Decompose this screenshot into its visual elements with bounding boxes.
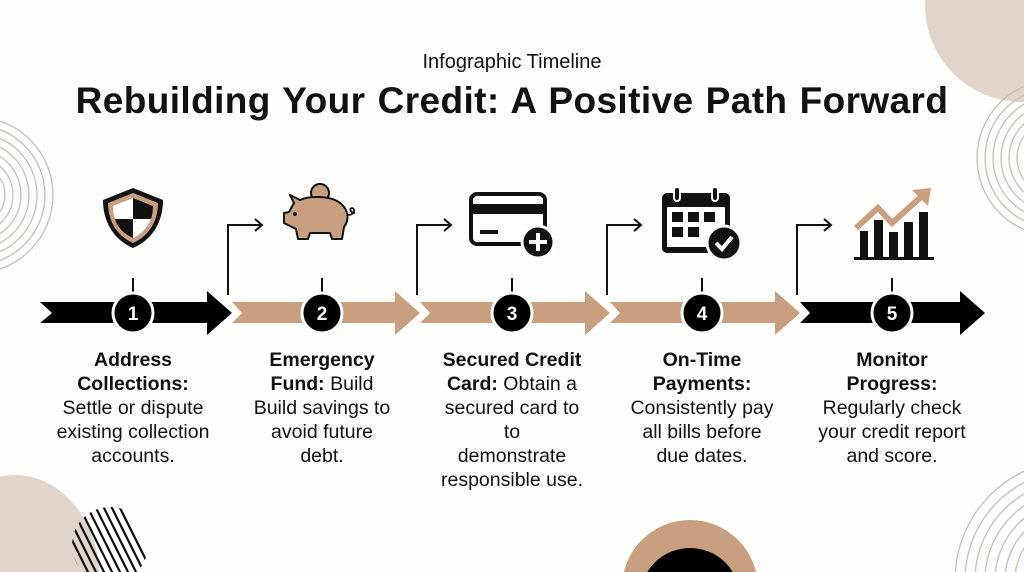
number circles: 3 xyxy=(507,304,517,325)
text: step 4: Consistently pay xyxy=(630,397,774,419)
text: step 3: Card: Obtain a xyxy=(447,373,577,395)
segment 1 xyxy=(40,291,232,335)
text: step 1: Settle or dispute xyxy=(63,397,203,419)
segment 5 xyxy=(800,291,985,335)
text: step 4: all bills before xyxy=(642,421,762,443)
text: step 1: Collections: xyxy=(77,373,189,395)
text: step 2 xyxy=(254,349,390,467)
segment 3 xyxy=(420,291,610,335)
text: step 2: Emergency xyxy=(269,349,375,371)
text: step 3: demonstrate xyxy=(458,445,566,467)
text: step 5: your credit report xyxy=(818,421,966,443)
text: step 1: existing collection xyxy=(57,421,209,443)
text: step 4: due dates. xyxy=(656,445,748,467)
text: step 3: responsible use. xyxy=(441,469,583,491)
text: step 3: Secured Credit xyxy=(443,349,581,371)
text: step 2: avoid future xyxy=(271,421,373,443)
subtitle: Infographic Timeline xyxy=(422,51,601,73)
number circles: 2 xyxy=(317,304,327,325)
icon: credit card with plus xyxy=(469,192,552,256)
text: step 5: Monitor xyxy=(856,349,928,371)
text: step 5 xyxy=(818,349,966,467)
text: step 5: Progress: xyxy=(846,373,938,395)
number circles: 5 xyxy=(887,304,898,325)
text: step 1: accounts. xyxy=(91,445,175,467)
text: step 3: secured card to xyxy=(445,397,579,419)
text: step 4 xyxy=(630,349,774,467)
segment 2 xyxy=(232,291,420,335)
text: step 1 xyxy=(57,349,209,467)
text: step 4: Payments: xyxy=(653,373,751,395)
icon: growth chart xyxy=(854,188,934,260)
elbow arrows xyxy=(228,225,262,295)
text: step 4: On-Time xyxy=(663,349,741,371)
title: Rebuilding Your Credit: A Positive Path Forward xyxy=(76,80,948,121)
number circles: 1 xyxy=(128,304,139,325)
text: step 3: to xyxy=(504,421,520,443)
text: step 5: Regularly check xyxy=(823,397,961,419)
icon: calendar with check xyxy=(662,188,740,258)
text: step 1: Address xyxy=(94,349,172,371)
text: step 2: Build savings to xyxy=(254,397,390,419)
icon: shield xyxy=(103,188,163,248)
text: step 3 xyxy=(441,349,583,491)
text: step 2: debt. xyxy=(300,445,344,467)
text: step 5: and score. xyxy=(846,445,938,467)
number circles xyxy=(113,293,912,333)
segment 4 xyxy=(610,291,800,335)
number circles: 4 xyxy=(697,304,708,325)
timeline arrows xyxy=(40,218,985,335)
icon: piggy bank xyxy=(283,183,355,240)
text: step 2: Fund: Build xyxy=(271,373,373,395)
